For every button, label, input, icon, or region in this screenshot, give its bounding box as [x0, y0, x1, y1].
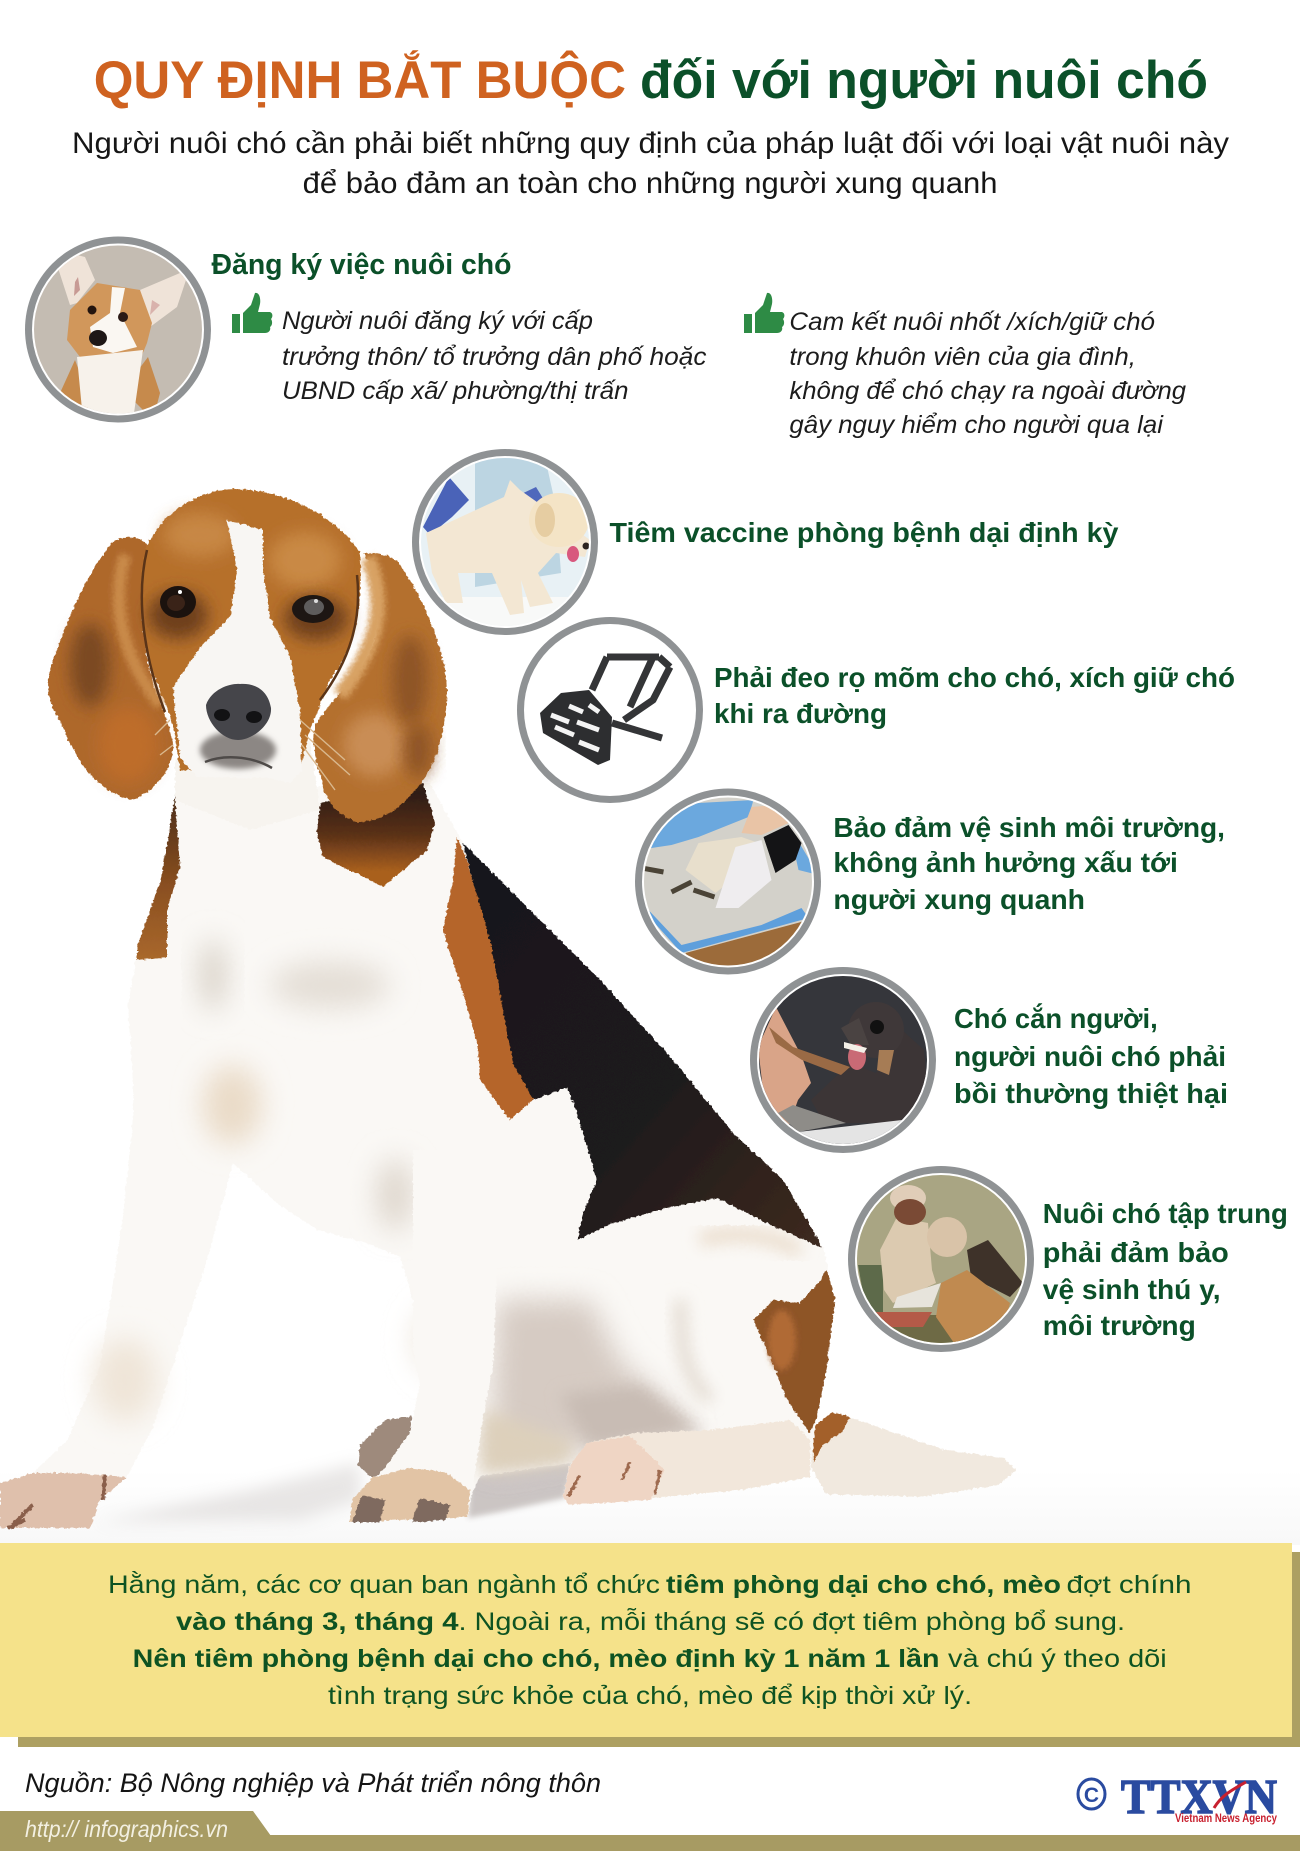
yellow callout panel	[0, 1543, 1300, 1747]
text: commitment: gây nguy hiểm cho người qua lại	[789, 411, 1164, 439]
label: bồi thường thiệt hại	[954, 1078, 1228, 1109]
source: Nguồn: Bộ Nông nghiệp và Phát triển nông thôn	[25, 1768, 601, 1798]
label: Chó cắn người,	[954, 1003, 1158, 1034]
left ear	[48, 537, 173, 800]
subtitle	[72, 127, 1229, 200]
label: người xung quanh	[833, 884, 1085, 915]
title: đối với người nuôi chó	[640, 51, 1208, 110]
label	[1043, 1198, 1288, 1341]
rear paw behind front leg	[358, 1416, 412, 1478]
muzzle grey	[200, 731, 276, 769]
label: Bảo đảm vệ sinh môi trường,	[833, 812, 1225, 843]
circle: corgi photo	[25, 236, 211, 422]
subtitle: Người nuôi chó cần phải biết những quy định của pháp luật đối với loại vật nuôi này	[72, 127, 1229, 160]
left paw	[0, 1473, 127, 1528]
callout text: tình trạng sức khỏe của chó, mèo để kịp thời xử lý.	[328, 1682, 972, 1710]
logo: TTXVN: Vietnam News Agency	[1175, 1811, 1277, 1825]
label: khi ra đường	[714, 698, 887, 729]
body silhouette	[0, 783, 835, 1528]
label: người nuôi chó phải	[954, 1041, 1226, 1072]
icon: thumbs up	[744, 293, 784, 333]
dog head	[48, 489, 447, 830]
hind tan patch	[753, 1270, 835, 1433]
text: registration: UBND cấp xã/ phường/thị trấn	[282, 377, 628, 405]
tail	[809, 1412, 1016, 1497]
circle: muzzle photo	[517, 617, 703, 803]
text: registration: Người nuôi đăng ký với cấp	[282, 307, 593, 335]
callout text: và chú ý theo dõi	[948, 1645, 1167, 1673]
label: vệ sinh thú y,	[1043, 1274, 1221, 1305]
text: commitment: Cam kết nuôi nhốt /xích/giữ chó	[789, 308, 1155, 336]
circle: litter photo	[635, 788, 821, 975]
right ear	[313, 553, 447, 822]
icon: thumbs up	[232, 293, 272, 333]
nose	[206, 684, 271, 740]
item 6: kennel	[848, 1166, 1288, 1352]
title	[94, 49, 1208, 110]
title: QUY ĐỊNH BẮT BUỘC	[94, 49, 626, 110]
heading: Đăng ký việc nuôi chó	[212, 249, 512, 281]
footer band with URL: http:// infographics.vn	[25, 1816, 228, 1842]
eyes	[160, 586, 334, 623]
label: Tiêm vaccine phòng bệnh dại định kỳ	[610, 517, 1119, 548]
floor shadow	[95, 1462, 360, 1522]
label: phải đảm bảo	[1043, 1237, 1229, 1268]
label: Phải đeo rọ mõm cho chó, xích giữ chó	[714, 662, 1235, 693]
item 3: muzzle	[517, 617, 1235, 803]
callout text: Hằng năm, các cơ quan ban ngành tổ chức	[108, 1570, 660, 1599]
head base	[141, 489, 361, 770]
whiskers	[155, 720, 350, 790]
callout text: . Ngoài ra, mỗi tháng sẽ có đợt tiêm phòng bổ sung.	[458, 1607, 1125, 1636]
callout text	[108, 1570, 1192, 1710]
white blaze and muzzle	[173, 520, 302, 783]
shadow under belly	[468, 1462, 575, 1518]
text: registration	[282, 307, 707, 405]
tan stripe	[443, 837, 533, 1120]
label	[714, 662, 1235, 729]
text: commitment	[789, 308, 1186, 439]
label: Nuôi chó tập trung	[1043, 1198, 1288, 1229]
neck left patch	[137, 775, 180, 960]
logo: TTXVN: TTXVN	[1121, 1769, 1277, 1824]
neck tan and black patch	[317, 783, 435, 887]
text: registration: trưởng thôn/ tổ trưởng dân phố hoặc	[282, 343, 707, 371]
callout text: đợt chính	[1066, 1571, 1192, 1599]
front right leg	[350, 1150, 497, 1522]
circle: kennel photo	[848, 1166, 1034, 1352]
label	[954, 1003, 1228, 1109]
logo: TTXVN: C	[1084, 1784, 1099, 1807]
circle: vaccine photo	[412, 449, 598, 640]
footer band with URL	[0, 1811, 1300, 1851]
item 1	[25, 236, 1186, 439]
item 2: vaccine	[412, 449, 1119, 640]
item 4: hygiene	[635, 788, 1225, 975]
hind leg	[563, 1420, 810, 1505]
item 5: dog bite	[750, 967, 1228, 1155]
belly shading	[93, 939, 800, 1474]
callout text: vào tháng 3, tháng 4	[176, 1608, 459, 1636]
label: không ảnh hưởng xấu tới	[833, 847, 1178, 878]
label: môi trường	[1043, 1310, 1196, 1341]
subtitle: để bảo đảm an toàn cho những người xung quanh	[303, 167, 998, 200]
label	[833, 812, 1225, 915]
text: commitment: trong khuôn viên của gia đình,	[789, 343, 1136, 371]
text: commitment: không để chó chạy ra ngoài đường	[789, 377, 1186, 405]
callout text: Nên tiêm phòng bệnh dại cho chó, mèo định kỳ 1 năm 1 lần	[133, 1645, 939, 1673]
creases	[142, 550, 358, 712]
circle: angry dog photo	[750, 967, 939, 1155]
neck and chin	[175, 740, 320, 830]
big beagle illustration	[0, 489, 1016, 1528]
callout text: tiêm phòng dại cho chó, mèo	[666, 1571, 1061, 1599]
black saddle	[463, 843, 822, 1248]
